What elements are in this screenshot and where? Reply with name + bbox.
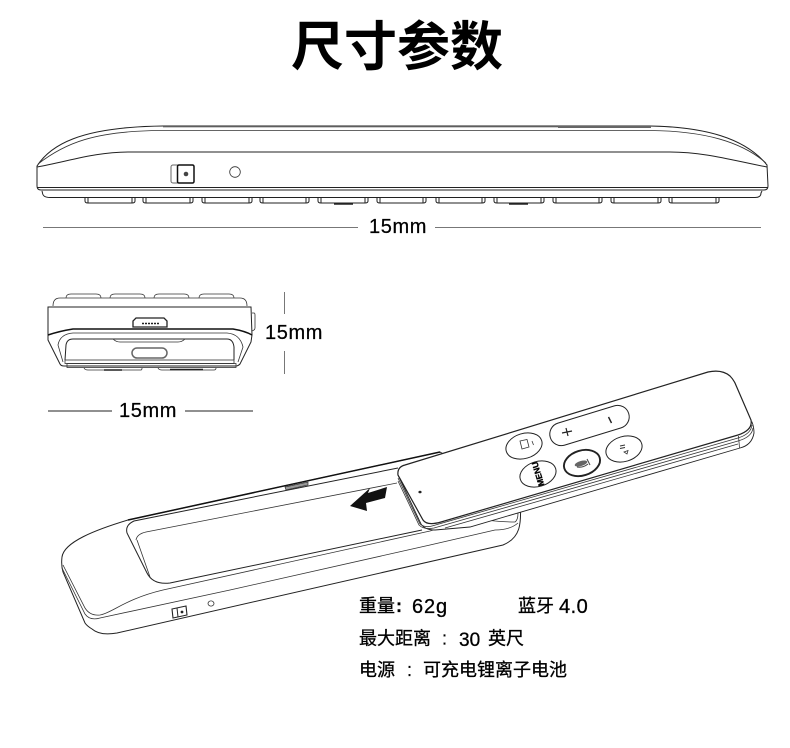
remote: side layers [398, 422, 754, 530]
spec: power: 可充电锂离子电池 [423, 660, 567, 680]
cradle: outer shell [62, 452, 521, 634]
end view: side key [252, 313, 255, 331]
spec: bluetooth: 4.0 [559, 596, 588, 618]
cradle: recess [127, 468, 422, 583]
remote control perspective [398, 371, 754, 530]
end view: body [48, 307, 252, 366]
spec: max distance: 英尺 [488, 628, 524, 648]
spec: max distance: 最大距离 [359, 628, 431, 648]
remote: menu label: MENU [530, 461, 546, 487]
cradle: switch [172, 606, 187, 618]
title: 尺寸参数 [291, 18, 503, 77]
spec: power: : [407, 660, 412, 680]
height dimension [265, 292, 323, 374]
remote: TV button [503, 429, 545, 463]
spec: bluetooth: 蓝牙 [518, 596, 554, 616]
end view width dimension: 15mm [119, 400, 177, 422]
side view: keys [85, 198, 719, 204]
front end view of remote [48, 294, 255, 370]
spec: weight: : [396, 596, 402, 616]
end view: oval slot [132, 348, 167, 358]
cradle: side contour lines [62, 513, 518, 619]
spec: max distance: : [442, 628, 447, 648]
remote: microphone button [561, 446, 603, 480]
spec: max distance: 30 [459, 630, 480, 651]
cradle: indicator hole [208, 601, 214, 606]
side view of remote [37, 126, 768, 204]
side view: lower tray [42, 191, 762, 198]
spec: weight: 重量 [359, 596, 395, 616]
arrow: slide direction [350, 487, 387, 511]
end view: micro USB port [133, 318, 167, 327]
remote: status light [418, 491, 422, 493]
side view: detail lines [37, 127, 768, 188]
remote: top face [398, 371, 751, 524]
end view: recess [58, 333, 243, 362]
spec: weight: 62g [412, 596, 448, 618]
side view: body outline [37, 126, 768, 190]
end view: body seam [48, 329, 252, 335]
end view: tray strip [65, 360, 236, 370]
remote: volume pill button [547, 403, 632, 448]
height dimension: 15mm [265, 322, 323, 344]
remote: menu button [517, 457, 559, 491]
cradle: upper edge [128, 452, 440, 520]
spec: power: 电源 [359, 660, 395, 680]
charging cradle [62, 452, 521, 634]
end view: keys [53, 294, 247, 306]
side view: indicator hole [230, 167, 240, 177]
cradle: top side button [285, 482, 308, 490]
width dimension: 15mm [369, 216, 427, 238]
remote: play pause button [603, 432, 645, 466]
side view: switch [171, 165, 194, 183]
